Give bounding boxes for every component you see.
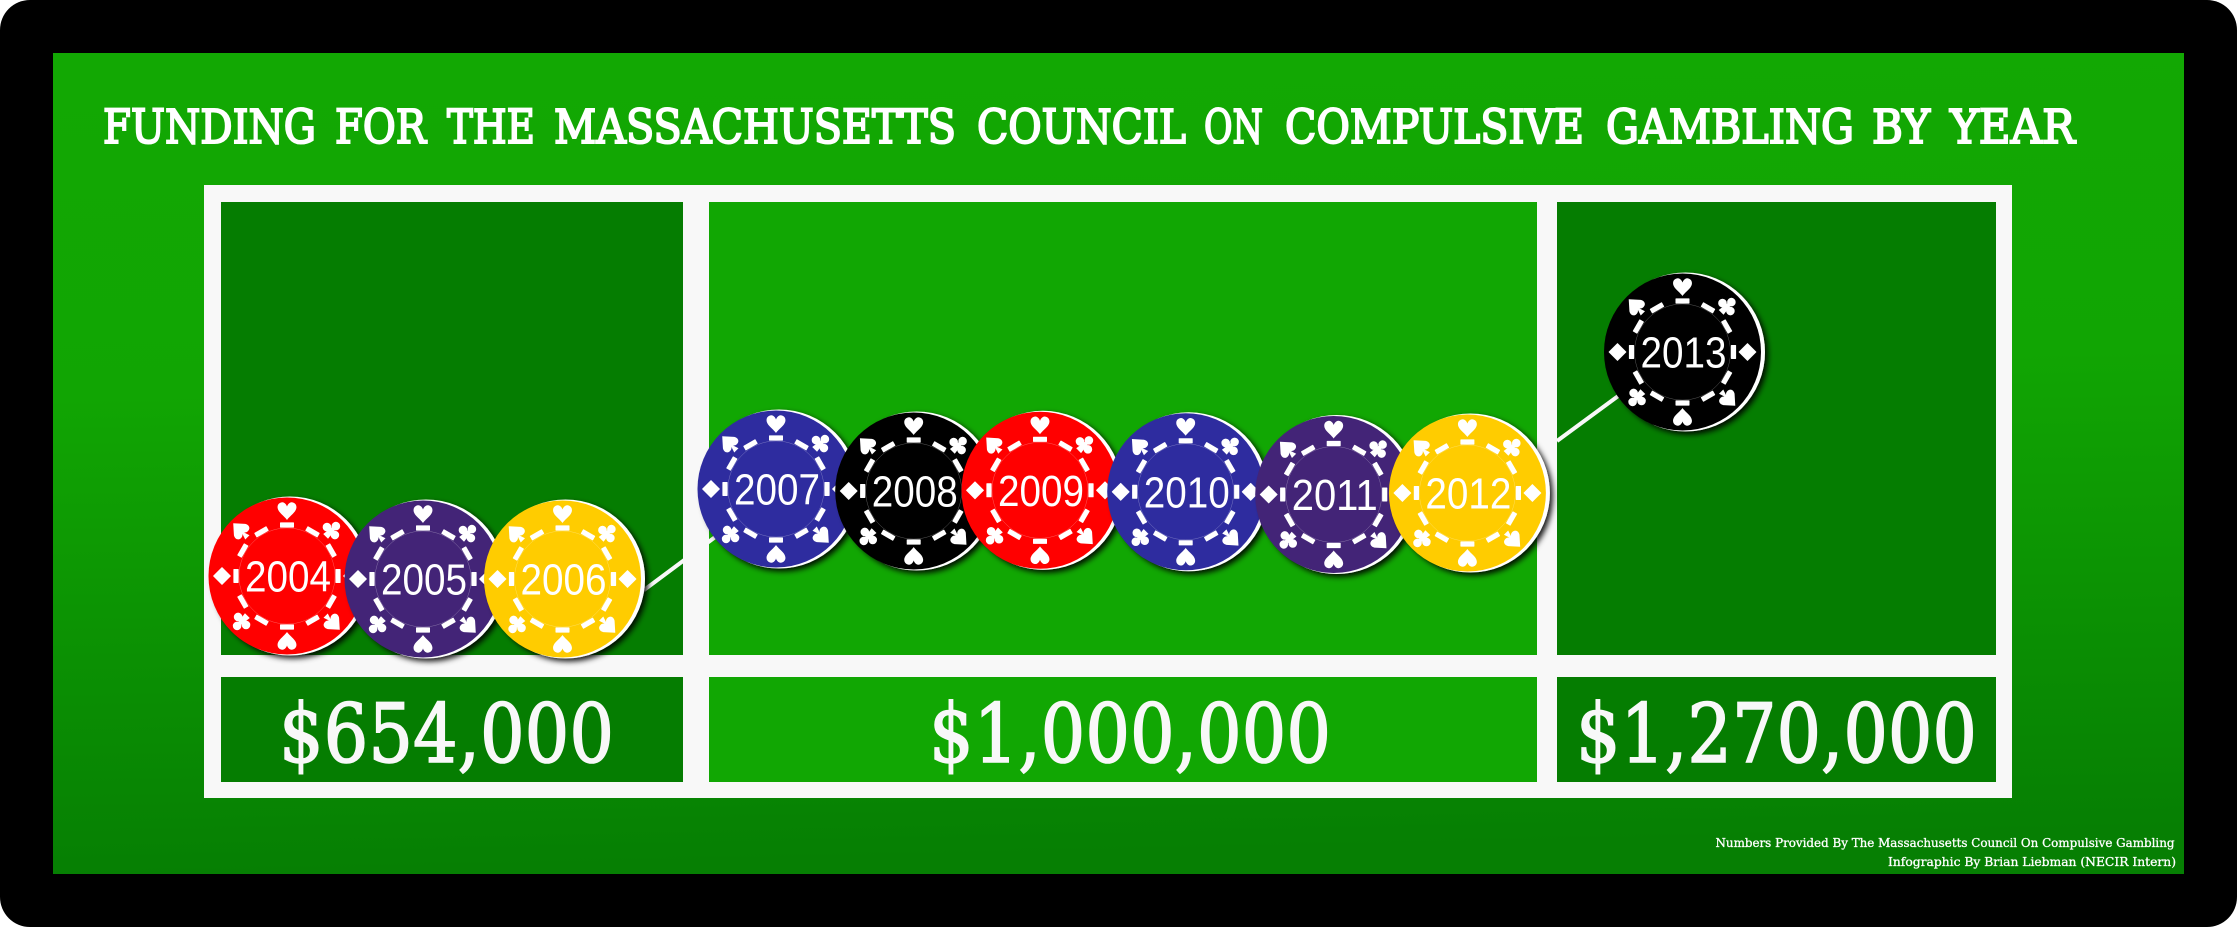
amount box: $1,000,000: $1,000,000	[929, 688, 1331, 782]
white table frame	[204, 185, 2012, 798]
chip: 2004	[208, 496, 370, 656]
source credits: Infographic By Brian Liebman (NECIR Intern)	[1888, 855, 2176, 869]
chip: 2005	[344, 500, 506, 658]
title: MASSACHUSETTS	[554, 100, 956, 154]
chip: 2009	[962, 411, 1122, 570]
chip: 2011: 2011	[1292, 471, 1378, 520]
chip: 2013: 2013	[1640, 328, 1726, 378]
panel: 2013 period	[1557, 202, 1996, 655]
title: BY	[1872, 100, 1931, 154]
connector line: 2012 to 2013	[1557, 391, 1625, 441]
amount box: $654,000: $654,000	[279, 688, 614, 782]
chip: 2006: 2006	[520, 556, 606, 604]
amount box: $1,270,000: $1,270,000	[1576, 688, 1977, 782]
chip: 2005: 2005	[381, 556, 467, 604]
chip: 2007	[698, 410, 858, 568]
connector line: 2006 to 2007	[640, 526, 730, 593]
title: FUNDING	[103, 100, 316, 154]
title: THE	[447, 100, 535, 154]
title: GAMBLING	[1606, 100, 1854, 154]
title: COUNCIL	[977, 100, 1186, 154]
chip: 2008: 2008	[872, 468, 958, 516]
title	[103, 100, 2077, 154]
chip: 2010	[1107, 412, 1268, 571]
title: COMPULSIVE	[1285, 100, 1584, 154]
chip: 2006	[484, 500, 645, 658]
chip: 2012	[1389, 414, 1550, 572]
chip: 2012: 2012	[1425, 470, 1511, 518]
chip: 2009: 2009	[998, 467, 1084, 516]
chip: 2007: 2007	[734, 466, 820, 514]
chip: 2010: 2010	[1144, 468, 1230, 517]
panel: 2007-2012 period	[709, 202, 1537, 655]
title: FOR	[335, 100, 428, 154]
chip: 2011	[1255, 415, 1416, 574]
chip: 2013	[1604, 272, 1765, 432]
title: YEAR	[1949, 100, 2077, 154]
source credits: Numbers Provided By The Massachusetts Council On Compulsive Gambling	[1716, 836, 2175, 850]
title: ON	[1204, 100, 1263, 154]
chip: 2008	[835, 412, 996, 570]
source credits	[1716, 836, 2176, 869]
amount box: $1,000,000	[709, 677, 1537, 782]
panel: 2004-2006 period	[221, 202, 683, 655]
chip: 2004: 2004	[245, 552, 331, 602]
